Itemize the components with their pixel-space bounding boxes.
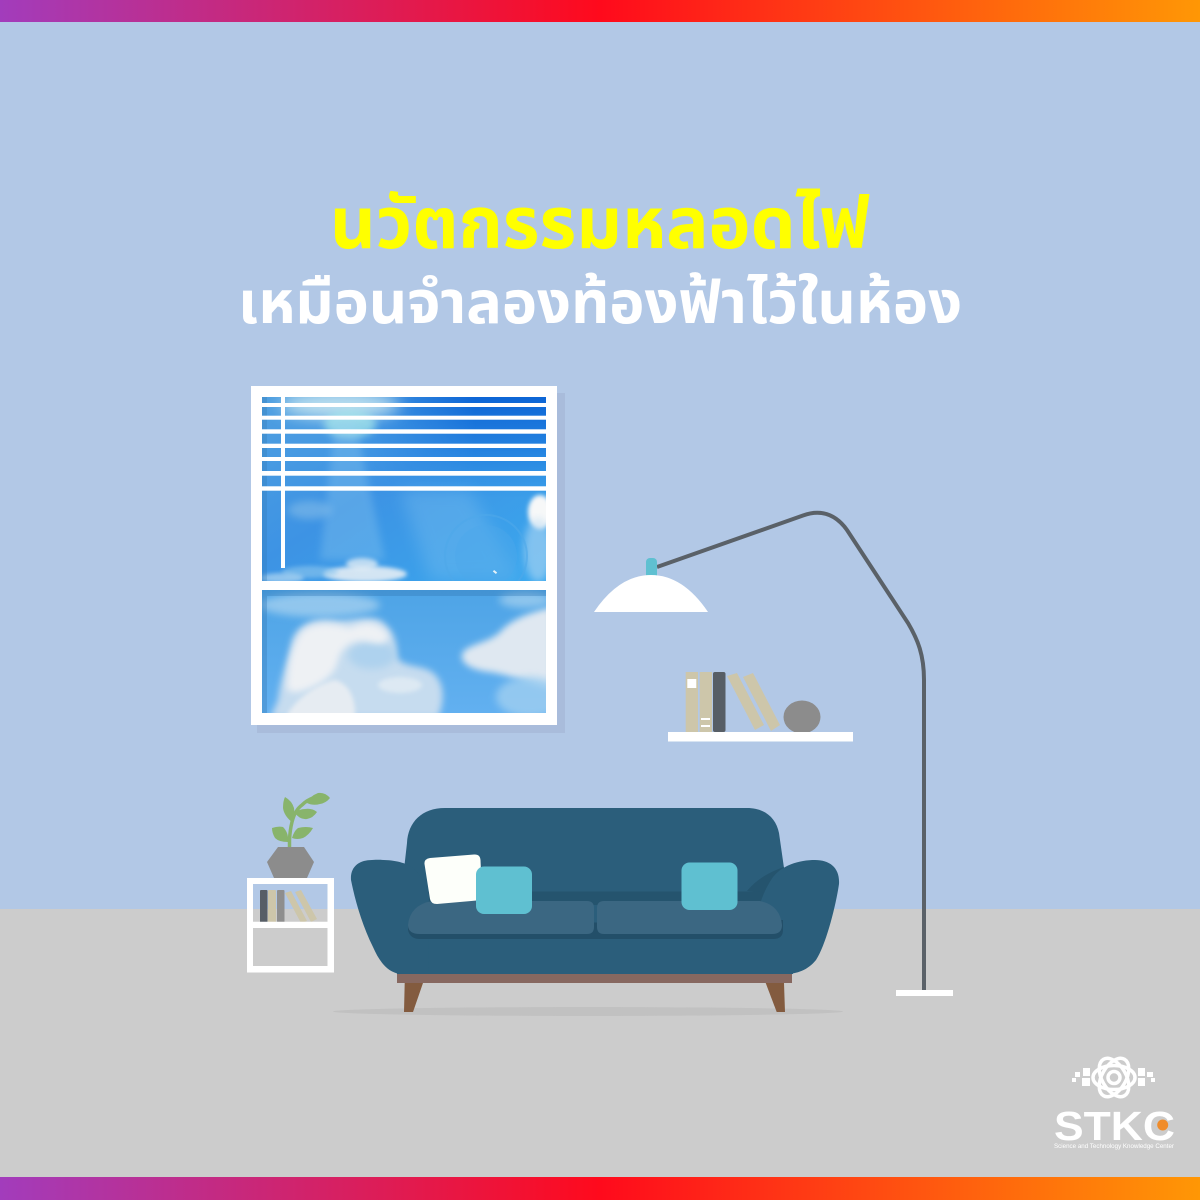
side table with plant (247, 793, 334, 972)
teal pillow left (476, 866, 532, 914)
plant pot (267, 847, 314, 878)
window shadow (257, 393, 565, 733)
floor (0, 909, 1200, 1200)
table books (260, 890, 317, 923)
sofa back (400, 808, 790, 905)
floor lamp (594, 513, 953, 996)
right seat cushion (597, 901, 782, 934)
blind slats (262, 403, 546, 491)
book: beige with label (686, 672, 698, 732)
sofa legs (404, 983, 423, 1012)
top gradient bar (0, 0, 1200, 22)
lamp base (896, 990, 953, 996)
right arm (761, 860, 839, 974)
floor shadow (333, 1007, 843, 1016)
shelf board (668, 732, 853, 742)
lower sky pane (262, 590, 546, 713)
plant (272, 793, 330, 848)
sofa seat body (397, 905, 793, 974)
book: dark (713, 672, 726, 732)
teal pillow right (682, 862, 738, 910)
white pillow (424, 854, 482, 904)
seat cushion shadow (408, 920, 783, 939)
logo: STKC (1054, 1053, 1175, 1150)
wall background (0, 0, 1200, 910)
lamp pole (657, 513, 924, 992)
window (251, 386, 565, 733)
title line 1: นวัตกรรมหลอดไฟ (330, 184, 870, 264)
book: beige with stripes (700, 672, 712, 732)
bottom gradient bar (0, 1177, 1200, 1200)
logo orange dot (1157, 1120, 1168, 1130)
leaning book two (743, 673, 780, 731)
stone (784, 700, 820, 734)
lamp shade (594, 575, 708, 612)
backrest shadow (410, 892, 780, 906)
sofa base (397, 974, 792, 983)
logo wordmark: STKC (1054, 1103, 1175, 1149)
title line 2: เหมือนจำลองท้องฟ้าไว้ในห้อง (238, 269, 962, 336)
logo tagline: Science and Technology Knowledge Center (1054, 1144, 1174, 1150)
sofa (351, 808, 839, 1012)
title (238, 184, 962, 336)
leaning book one (727, 673, 764, 730)
right cloud (462, 607, 552, 690)
wall shelf with books (668, 672, 853, 742)
big cumulus left (270, 618, 443, 718)
logo data squares (1072, 1068, 1155, 1086)
left seat cushion (408, 901, 594, 934)
upper sky pane (262, 397, 546, 581)
blind cord (281, 397, 285, 568)
table frame (247, 878, 334, 972)
lamp neck (646, 558, 657, 580)
logo atom icon (1093, 1053, 1135, 1102)
left arm (351, 860, 429, 974)
window frame (251, 386, 557, 725)
